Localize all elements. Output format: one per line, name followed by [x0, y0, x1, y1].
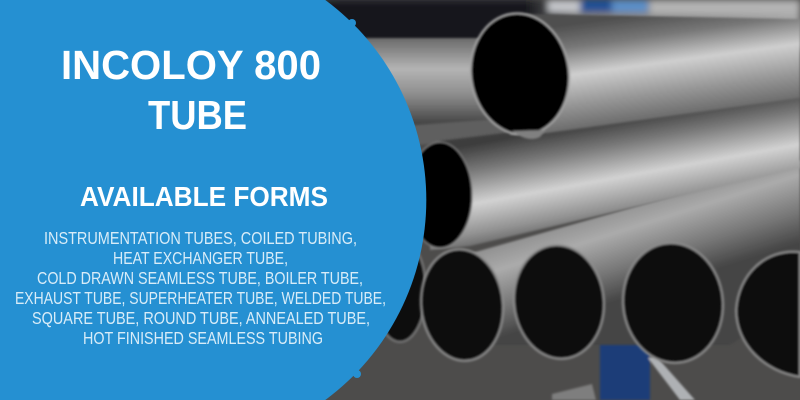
text block: list of tube forms: INSTRUMENTATION TUBES, COILED TUBING, — [44, 228, 357, 248]
heading: available forms: AVAILABLE FORMS — [80, 181, 328, 212]
lower tube opening 1 — [415, 245, 509, 365]
photo background — [300, 0, 800, 50]
blue post and floor details — [552, 340, 695, 400]
lower tube opening 3 — [617, 238, 729, 368]
lower tube row body — [440, 160, 800, 345]
text block: list of tube forms: SQUARE TUBE, ROUND TUBE, ANNEALED TUBE, — [32, 308, 370, 328]
middle tube opening — [408, 142, 472, 248]
far left lower opening — [374, 238, 426, 342]
text block: list of tube forms: COLD DRAWN SEAMLESS TUBE, BOILER TUBE, — [37, 268, 363, 288]
upper tube opening — [463, 7, 577, 141]
text block: list of tube forms: EXHAUST TUBE, SUPERHEATER TUBE, WELDED TUBE, — [15, 288, 386, 308]
text block: list of tube forms: HEAT EXCHANGER TUBE, — [113, 248, 288, 268]
photo: stainless steel tubes — [300, 0, 800, 400]
title: INCOLOY 800 — [61, 42, 321, 88]
upper tube body — [510, 14, 800, 135]
title — [61, 42, 321, 138]
workshop floor — [340, 320, 800, 400]
lower tube opening 2 — [508, 241, 610, 363]
middle tube body — [430, 96, 800, 250]
text block: list of tube forms: HOT FINISHED SEAMLESS TUBING — [83, 328, 323, 348]
back tube — [340, 38, 490, 132]
panel: blue semicircle — [0, 0, 426, 400]
lower tube opening 4 — [736, 252, 800, 377]
title: TUBE — [148, 92, 247, 138]
text block: list of tube forms — [15, 228, 386, 348]
